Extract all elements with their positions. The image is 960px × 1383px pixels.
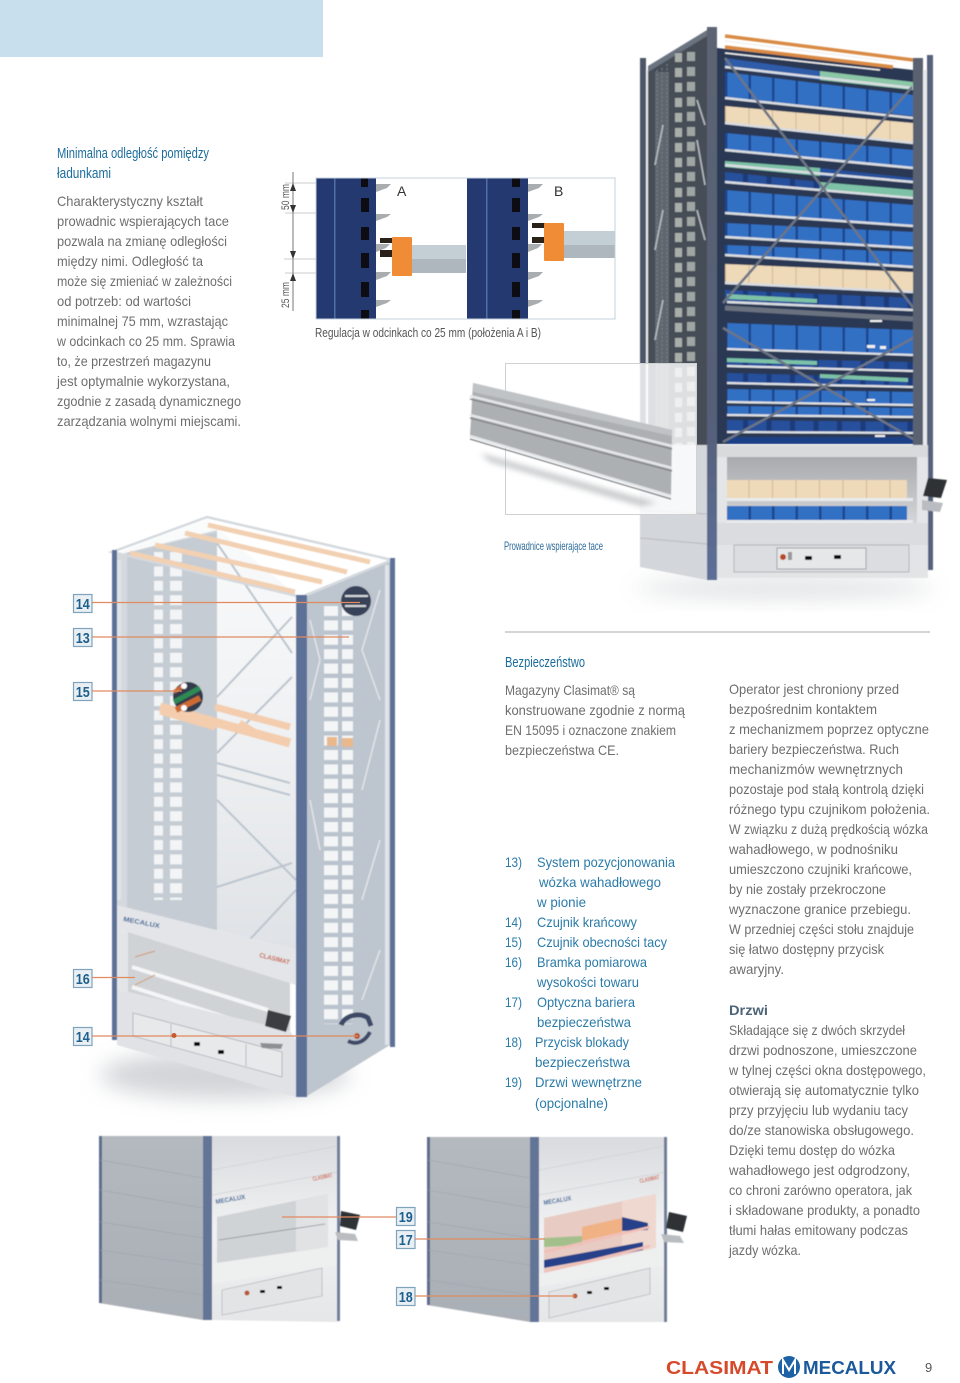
paragraph: doors: do/ze stanowiska obsługowego.: [729, 1122, 914, 1138]
numbered list of safety elements: 18): [505, 1034, 522, 1050]
callout 18: 18: [399, 1289, 413, 1306]
logos: MECALUX: [543, 1195, 572, 1207]
paragraph: operator protection: [728, 681, 930, 977]
paragraph: operator protection: by nie zostały przekroczone: [729, 881, 886, 897]
caption: adjustment: Regulacja w odcinkach co 25 mm (położenia A i B): [315, 325, 541, 340]
heading: doors: Drzwi: [729, 1002, 768, 1018]
dimension lines: [280, 172, 466, 311]
icon: control screen: [922, 478, 947, 512]
paragraph: minimum distance: minimalnej 75 mm, wzrastając: [57, 313, 228, 329]
position A bracket: [392, 237, 412, 276]
paragraph: minimum distance: jest optymalnie wykorzystana,: [56, 373, 230, 389]
dimension lines: 50 mm: [280, 184, 292, 210]
paragraph: minimum distance: prowadnic wspierających tace: [57, 213, 229, 229]
paragraph: operator protection: wahadłowego, w podnośniku: [728, 841, 898, 857]
lower front panel: [117, 905, 296, 985]
callout 19: 19: [399, 1209, 413, 1226]
caption: guide rails: Prowadnice wspierające tace: [504, 539, 603, 553]
paragraph: doors: [728, 1022, 926, 1258]
heading: minimum distance: Minimalna odległość pomiędzy: [57, 145, 209, 162]
numbered list of safety elements: w pionie: [536, 894, 586, 910]
paragraph: minimum distance: w odcinkach co 25 mm. Sprawia: [56, 333, 235, 349]
numbered list of safety elements: 19): [505, 1074, 522, 1090]
front corner post: [296, 595, 307, 1097]
text block: minimum distance: [56, 145, 241, 429]
logos: MECALUX: [215, 1194, 247, 1206]
paragraph: operator protection: Operator jest chroniony przed: [729, 681, 899, 697]
heading: minimum distance: [57, 145, 209, 182]
guide rail: [470, 383, 672, 499]
paragraph: doors: wahadłowego jest odgrodzony,: [728, 1162, 910, 1178]
callout 19: [282, 1208, 415, 1226]
front corner post: [707, 27, 717, 580]
icon: control screen: [335, 1211, 360, 1241]
numbered list of safety elements: (opcjonalne): [535, 1095, 608, 1111]
paragraph: minimum distance: [56, 193, 241, 429]
paragraph: operator protection: pozostaje pod stałą kontrolą dzięki: [729, 781, 924, 797]
top colour band: [0, 0, 323, 57]
paragraph: doors: i składowane produkty, a ponadto: [729, 1202, 920, 1218]
paragraph: operator protection: wyznaczone granice przebiegu.: [728, 901, 911, 917]
paragraph: doors: otwierają się automatycznie tylko: [729, 1082, 919, 1098]
numbered list of safety elements: 16): [505, 954, 522, 970]
callout 18: [396, 1288, 575, 1306]
icon: control screen: [260, 1010, 291, 1049]
paragraph: operator protection: bezpośrednim kontaktem: [729, 701, 877, 717]
numbered list of safety elements: Drzwi wewnętrzne: [535, 1074, 642, 1090]
paragraph: doors: jazdy wózka.: [728, 1242, 801, 1258]
callout 17: [396, 1230, 545, 1249]
paragraph: doors: drzwi podnoszone, umieszczone: [729, 1042, 917, 1058]
callout 15: 15: [76, 684, 90, 701]
paragraph: operator protection: umieszczono czujniki krańcowe,: [729, 861, 912, 877]
callout 14 bottom: [74, 1028, 358, 1046]
paragraph: standards: bezpieczeństwa CE.: [505, 742, 619, 758]
stored goods: [544, 1217, 648, 1268]
paragraph: operator protection: bariery bezpieczeństwa. Ruch: [729, 741, 899, 757]
footer logo: Clasimat Mecalux: MECALUX: [803, 1358, 896, 1378]
paragraph: operator protection: W związku z dużą prędkością wózka: [729, 821, 928, 837]
dimension lines: 25 mm: [280, 282, 292, 308]
illustration: cabinet with open doors and light barrier: [427, 1137, 687, 1322]
soft floor shadow: [100, 1051, 350, 1099]
numbered list of safety elements: bezpieczeństwa: [535, 1054, 630, 1070]
illustration: cabinet with closed doors: [99, 1136, 360, 1322]
heading: minimum distance: ładunkami: [57, 165, 111, 182]
paragraph: doors: w tylnej części okna dostępowego,: [728, 1062, 926, 1078]
sensor detail 15: [173, 682, 203, 712]
footer logo: Clasimat Mecalux: [666, 1356, 896, 1378]
rail shadow: [480, 453, 657, 506]
posts: [112, 550, 117, 1040]
shuttle: [160, 707, 353, 747]
numbered list of safety elements: wysokości towaru: [536, 974, 639, 990]
paragraph: operator protection: W przedniej części stołu znajduje: [729, 921, 914, 937]
callout 17: 17: [399, 1232, 413, 1249]
orange roof bars: [130, 525, 370, 592]
sensor detail 14 top: [341, 586, 371, 616]
paragraph: doors: co chroni zarówno operatora, jak: [729, 1182, 913, 1198]
tray shelves: [725, 67, 913, 433]
panel: guide rail photo: [470, 364, 696, 553]
illustration: transparent tower with safety sensors: [100, 517, 395, 1099]
base cabinet: [717, 523, 928, 578]
logos on panel: MECALUX: [123, 916, 161, 930]
illustration: Clasimat storage tower with trays: [635, 27, 947, 597]
paragraph: standards: konstruowane zgodnie z normą: [505, 702, 685, 718]
callout 13: 13: [76, 630, 90, 647]
illustration: transparent tower with safety sensors: CLASIMAT: [259, 952, 290, 966]
footer logo: Clasimat Mecalux: CLASIMAT: [666, 1358, 773, 1378]
paragraph: operator protection: różnego typu czujnikom położenia.: [729, 801, 930, 817]
numbered list of safety elements: Przycisk blokady: [535, 1034, 629, 1050]
right uprights: [927, 55, 933, 570]
page number: 9: [925, 1360, 932, 1375]
paragraph: minimum distance: od potrzeb: od wartości: [57, 293, 191, 309]
rear braces: [217, 543, 296, 950]
callout 16: [74, 970, 135, 988]
numbered list of safety elements: 14): [505, 914, 522, 930]
numbered list of safety elements: 17): [505, 994, 522, 1010]
icon: Mecalux emblem: [778, 1356, 800, 1378]
paragraph: minimum distance: zgodnie z zasadą dynamicznego: [57, 393, 241, 409]
paragraph: doors: Składające się z dwóch skrzydeł: [729, 1022, 906, 1038]
paragraph: doors: tłumi hałas emitowany podczas: [729, 1222, 908, 1238]
paragraph: minimum distance: zarządzania wolnymi miejscami.: [57, 413, 241, 429]
diagram: adjustment in 25 mm steps: [280, 172, 615, 340]
lower left panel: [640, 445, 707, 580]
interior of rack: [717, 48, 913, 444]
illustration: cabinet with closed doors: CLASIMAT: [312, 1173, 333, 1183]
paragraph: standards: EN 15095 i oznaczone znakiem: [505, 722, 676, 738]
paragraph: operator protection: się łatwo dostępny przycisk: [729, 941, 885, 957]
numbered list of safety elements: 13): [505, 854, 522, 870]
numbered list of safety elements: System pozycjonowania: [537, 854, 675, 870]
paragraph: doors: przy przyjęciu lub wydaniu tacy: [729, 1102, 908, 1118]
soft floor shadow: [635, 579, 935, 597]
paragraph: operator protection: awaryjny.: [729, 961, 784, 977]
access window: [717, 445, 928, 523]
icon: control screen: [661, 1212, 687, 1243]
paragraph: operator protection: mechanizmów wewnętrznych: [729, 761, 903, 777]
right side face: [307, 562, 390, 1096]
numbered list of safety elements: Czujnik krańcowy: [537, 914, 637, 930]
label A: A: [397, 183, 407, 199]
paragraph: minimum distance: Charakterystyczny kształt: [57, 193, 203, 209]
roof bars: [725, 36, 913, 70]
cross braces: [723, 58, 915, 442]
paragraph: minimum distance: może się zmieniać w zależności: [57, 273, 232, 289]
sensor detail 14 bottom: [341, 1015, 371, 1043]
paragraph: minimum distance: między nimi. Odległość ta: [57, 253, 203, 269]
roof outline: [112, 517, 392, 597]
paragraph: minimum distance: pozwala na zmianę odległości: [57, 233, 227, 249]
numbered list of safety elements: Bramka pomiarowa: [537, 954, 647, 970]
paragraph: doors: Dzięki temu dostęp do wózka: [729, 1142, 895, 1158]
position B bracket: [544, 223, 564, 261]
label B: B: [554, 183, 563, 199]
section divider: [505, 631, 930, 633]
numbered list of safety elements: [505, 854, 675, 1111]
callout 14 top: 14: [76, 596, 90, 613]
numbered list of safety elements: wózka wahadłowego: [538, 874, 661, 890]
callout 14 top: [74, 594, 360, 613]
heading: safety: Bezpieczeństwo: [505, 654, 585, 671]
numbered list of safety elements: 15): [505, 934, 522, 950]
paragraph: standards: [505, 682, 685, 758]
callout 16: 16: [76, 971, 90, 988]
callout 15: [74, 682, 182, 701]
paragraph: standards: Magazyny Clasimat® są: [505, 682, 635, 698]
numbered list of safety elements: Czujnik obecności tacy: [537, 934, 667, 950]
paragraph: operator protection: z mechanizmem poprzez optyczne: [729, 721, 929, 737]
numbered list of safety elements: Optyczna bariera: [537, 994, 635, 1010]
illustration: cabinet with open doors and light barrier: CLASIMAT: [639, 1175, 660, 1185]
numbered list of safety elements: bezpieczeństwa: [537, 1014, 631, 1030]
paragraph: minimum distance: to, że przestrzeń magazynu: [57, 353, 211, 369]
callout 14 bottom: 14: [76, 1029, 90, 1046]
callout 13: [74, 628, 349, 647]
panel: position A and B photo: [316, 178, 615, 319]
